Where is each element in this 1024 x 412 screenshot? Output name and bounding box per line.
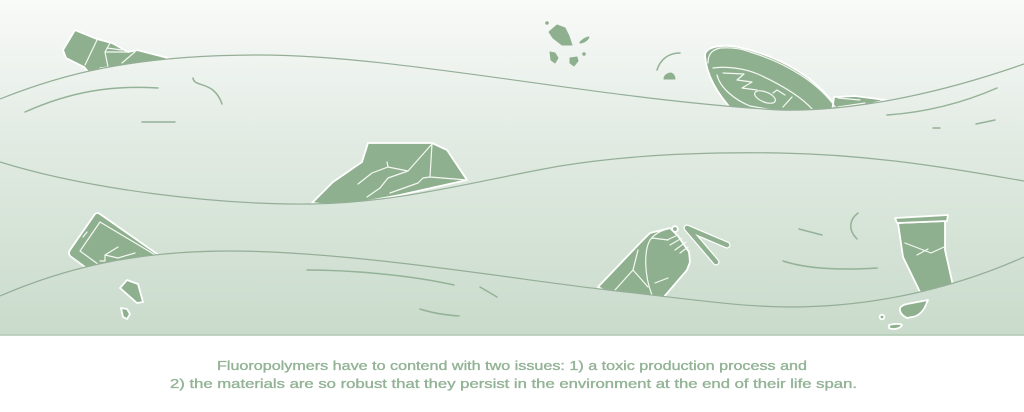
icon: pebbles lower left: [120, 280, 143, 319]
icon: rock fragments: [545, 21, 675, 79]
caption: [170, 358, 857, 391]
strokes: front wave motion marks: [307, 213, 877, 316]
icon: crumpled rock: [312, 143, 467, 206]
icon: broken phone: [69, 213, 160, 278]
icon: broken tube top left: [63, 30, 168, 74]
caption: Fluoropolymers have to contend with two issues: 1) a toxic production process and: [217, 358, 807, 373]
icon: shard and pebbles lower right: [880, 300, 928, 329]
bottom rule: [0, 334, 1024, 336]
icon: spray can: [598, 226, 727, 298]
icon: broken frying pan: [705, 46, 886, 113]
wave: back: [0, 55, 1024, 335]
wave: front: [0, 251, 1024, 335]
icon: torn cup: [895, 215, 954, 292]
strokes: back wave motion marks: [25, 53, 997, 128]
wave: middle: [0, 153, 1024, 335]
caption: 2) the materials are so robust that they persist in the environment at the end of their life span.: [170, 376, 857, 391]
